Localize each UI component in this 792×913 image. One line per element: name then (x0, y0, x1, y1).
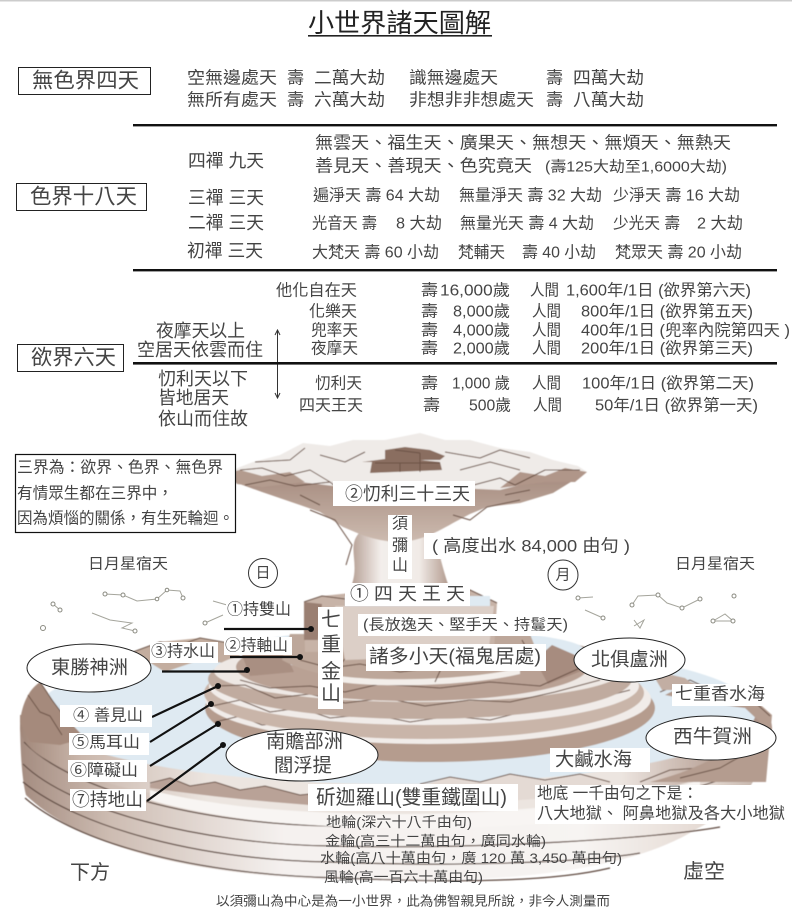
desire heavens table: 50年/1日 (欲界第一天) (595, 396, 758, 414)
formless heavens list: 壽 (287, 90, 304, 110)
panel: desire realm (18, 280, 790, 429)
form heavens list: 無量光天 壽 4 大劫 (460, 214, 594, 232)
desire heavens table: 人間 (532, 302, 561, 320)
desire heavens table: 壽 (421, 374, 438, 392)
footer note: 以須彌山為中心是為一小世界，此為佛智親見所說，非今人測量而 (216, 894, 610, 908)
formless heavens list: 壽 (546, 68, 563, 88)
continent: 南贍部洲 閻浮提: 閻浮提 (274, 754, 332, 776)
panel: formless realm (18, 68, 644, 110)
desire heavens table: 人間 (532, 374, 561, 392)
desire heavens table: 壽 (421, 340, 438, 358)
desire heavens table: 2,000歲 (453, 340, 510, 358)
ring: outer iron mountain rim (20, 642, 772, 814)
palace (362, 447, 445, 473)
label: 大鹹水海 (550, 748, 650, 772)
desire heavens table: 800年/1日 (欲界第五天) (581, 302, 753, 320)
desire heavens table: 8,000歲 (453, 302, 510, 320)
label: 障礙山: ⑥障礙山 (70, 762, 138, 780)
seven golden mountains rings (204, 590, 655, 762)
continent: 北俱盧洲 (574, 638, 685, 682)
formless heavens list (187, 68, 644, 110)
desire heavens table: 忉利天 (315, 374, 362, 392)
formless heavens list: 無所有處天 (187, 90, 277, 110)
form heavens list: 8 大劫 (396, 214, 442, 232)
desire heavens table: 200年/1日 (欲界第三天) (581, 338, 753, 358)
dhyana names: 二禪 三天 (188, 213, 264, 233)
label: 忉利三十三天: ②忉利三十三天 (345, 484, 470, 504)
note: hells below the earth: 地底 一千由句之下是： (537, 784, 698, 802)
label box: 無色界四天 (18, 68, 150, 94)
label box: 色界十八天 (16, 184, 146, 210)
label: 下方: 下方 (70, 861, 110, 884)
note: heavens below (158, 369, 248, 429)
rim ridges (20, 636, 772, 806)
label: height of Sumeru (424, 533, 636, 559)
soft artwork (20, 433, 772, 881)
continent: 西牛賀洲: 西牛賀洲 (673, 726, 752, 748)
label: 日月星宿天 right: 日月星宿天 (675, 556, 755, 572)
label: 諸多小天: 諸多小天(福鬼居處) (369, 646, 541, 668)
label: height of Sumeru: ( 高度出水 84,000 由句 ) (432, 536, 630, 556)
desire heavens table: 化樂天 (309, 302, 357, 320)
leader lines (147, 626, 314, 801)
formless heavens list: 二萬大劫 (314, 68, 385, 88)
form heavens list (312, 134, 743, 262)
continent: 西牛賀洲 (646, 716, 776, 760)
desire heavens table: 1,600年/1日 (欲界第六天) (566, 280, 751, 300)
continent: 北俱盧洲: 北俱盧洲 (591, 648, 668, 670)
label box: 欲界六天: 欲界六天 (31, 346, 116, 370)
label: 持水山: ③持水山 (151, 642, 215, 660)
illustration: Mount Sumeru cosmos (20, 433, 772, 881)
label: four kings' sub-heavens: (長放逸天、堅手天、持鬘天) (363, 616, 568, 634)
desire heavens table: 人間 (532, 322, 561, 340)
label: 障礙山 (68, 760, 147, 782)
icon: moon (548, 560, 578, 590)
note: heavens above: 夜摩天以上 (156, 321, 245, 341)
dhyana names: 初禪 三天 (187, 241, 263, 261)
form heavens list: 梵輔天 (458, 244, 505, 262)
label: 持雙山: ①持雙山 (227, 600, 291, 618)
desire heavens table: 壽 (421, 282, 438, 300)
formless heavens list: 空無邊處天 (187, 68, 277, 88)
top disc of Trayastrimsa heaven (227, 433, 587, 565)
callout: three realms: 有情眾生都在三界中， (17, 484, 173, 502)
desire heavens table: 4,000歲 (453, 322, 510, 340)
formless heavens list: 非想非非想處天 (409, 90, 534, 110)
dhyana names (187, 151, 264, 261)
label: 七重金山: 山 (321, 682, 341, 705)
continent: 南贍部洲 閻浮提 (226, 729, 378, 781)
label: 日月星宿天 left: 日月星宿天 (88, 556, 168, 572)
form heavens list: 光音天 壽 (312, 214, 377, 232)
form heavens list: 2 大劫 (697, 214, 743, 232)
desire heavens table (276, 280, 790, 414)
label: 馬耳山: ⑤馬耳山 (72, 734, 140, 752)
desire heavens table: 500歲 (469, 396, 511, 414)
labels: four wheels: 金輪(高三十二萬由句，廣同水輪) (325, 833, 546, 849)
desire heavens table: 他化自在天 (276, 282, 357, 300)
callout: three realms: 三界為：欲界、色界、無色界 (17, 458, 223, 476)
form heavens list: (壽125大劫至1,6000大劫) (545, 158, 727, 176)
desire heavens table: 兜率天 (311, 322, 358, 340)
desire heavens table: 壽 (421, 302, 438, 320)
label: 七重香水海: 七重香水海 (675, 684, 765, 704)
desire heavens table: 1,000 歲 (452, 374, 510, 392)
label: 善見山 (60, 705, 152, 727)
strata: wheels below the world (20, 715, 771, 881)
label: 須彌山: 彌 (392, 536, 408, 554)
top edge strip (0, 0, 792, 2)
callout: three realms (16, 454, 236, 532)
label box: 無色界四天: 無色界四天 (32, 70, 139, 92)
desire heavens table: 16,000歲 (440, 282, 510, 300)
note: heavens below: 忉利天以下 (158, 369, 248, 389)
continent: 南贍部洲 閻浮提: 南贍部洲 (266, 730, 343, 752)
icon: sun (248, 558, 278, 588)
label: 善見山: ④ 善見山 (73, 706, 143, 724)
label: 大鹹水海: 大鹹水海 (555, 748, 632, 770)
form heavens list: 大梵天 壽 60 小劫 (312, 244, 439, 262)
desire heavens table: 400年/1日 (兜率內院第四天 ) (581, 320, 790, 340)
label: 斫迦羅山: 斫迦羅山(雙重鐵圍山) (316, 786, 507, 809)
desire heavens table: 夜摩天 (311, 340, 358, 358)
note: hells below the earth: 八大地獄、 阿鼻地獄及各大小地獄 (537, 804, 785, 822)
labels: four wheels: 風輪(高一百六十萬由句) (324, 869, 483, 885)
formless heavens list: 壽 (546, 90, 563, 110)
label: 馬耳山 (69, 733, 149, 755)
formless heavens list: 四萬大劫 (573, 68, 644, 88)
label: 須彌山 (388, 514, 412, 579)
form heavens list: 遍淨天 壽 64 大劫 (313, 186, 440, 204)
label: 七重金山 (318, 607, 343, 709)
callout: three realms: 因為煩惱的關係，有生死輪迴。 (17, 508, 234, 528)
note: hells below the earth (535, 784, 787, 824)
label: 七重金山: 七 (321, 608, 341, 631)
label: 須彌山: 須 (392, 514, 408, 532)
label: 四天王天: ① 四 天 王 天 (350, 584, 465, 604)
continent: 東勝神洲 (27, 644, 151, 692)
label: 須彌山: 山 (392, 556, 408, 574)
label box: 欲界六天 (18, 344, 124, 372)
form heavens list: 壽 40 小劫 (522, 244, 596, 262)
form heavens list: 善見天、善現天、色究竟天 (315, 156, 532, 176)
formless heavens list: 六萬大劫 (314, 90, 385, 110)
desire heavens table: 壽 (421, 322, 438, 340)
desire heavens table: 100年/1日 (欲界第二天) (582, 374, 754, 392)
form heavens list: 梵眾天 壽 20 小劫 (615, 244, 742, 262)
note: heavens below: 依山而住故 (158, 409, 248, 429)
title: 小世界諸天圖解 (308, 8, 491, 38)
desire heavens table: 壽 (423, 396, 440, 414)
dhyana names: 四禪 九天 (188, 151, 264, 171)
dhyana names: 三禪 三天 (188, 188, 264, 208)
desire heavens table: 人間 (533, 396, 562, 414)
formless heavens list: 識無邊處天 (409, 68, 498, 88)
desire heavens table: 人間 (530, 282, 559, 300)
label: 持軸山: ②持軸山 (225, 636, 288, 654)
formless heavens list: 壽 (287, 68, 304, 88)
label: 虛空: 虛空 (683, 860, 725, 883)
desire heavens table: 人間 (532, 340, 561, 358)
label box: 色界十八天: 色界十八天 (30, 186, 137, 208)
label: 持地山: ⑦持地山 (72, 790, 143, 810)
labels: four wheels (320, 814, 622, 885)
form heavens list: 無雲天、福生天、廣果天、無想天、無煩天、無熱天 (315, 134, 731, 152)
divider between air and earth heavens (133, 362, 777, 365)
arrow: up and down (275, 330, 280, 398)
outer rim light surface (150, 780, 700, 828)
desire heavens table: 四天王天 (299, 398, 363, 414)
note: heavens below: 皆地居天 (158, 388, 229, 408)
form heavens list: 少淨天 壽 16 大劫 (613, 186, 740, 204)
icon: sun: 日 (256, 564, 271, 582)
form heavens list: 無量淨天 壽 32 大劫 (459, 186, 602, 204)
form heavens list: 少光天 壽 (613, 214, 680, 232)
constellations (40, 588, 736, 633)
note: heavens above: 空居天依雲而住 (137, 340, 263, 360)
note: heavens above (137, 321, 263, 360)
formless heavens list: 八萬大劫 (573, 90, 644, 110)
label: 七重金山: 金 (321, 660, 341, 683)
great salty sea water (36, 640, 756, 784)
labels: four wheels: 水輪(高八十萬由句，廣 120 萬 3,450 萬由句) (320, 850, 622, 866)
labels: four wheels: 地輪(深六十八千由句) (326, 814, 472, 830)
label: 七重金山: 重 (321, 633, 341, 656)
panel: form realm (16, 134, 743, 262)
label: four kings' sub-heavens (358, 614, 570, 636)
Sumeru pillar (352, 528, 448, 584)
continent: 東勝神洲: 東勝神洲 (51, 656, 128, 678)
icon: moon: 月 (556, 566, 571, 584)
